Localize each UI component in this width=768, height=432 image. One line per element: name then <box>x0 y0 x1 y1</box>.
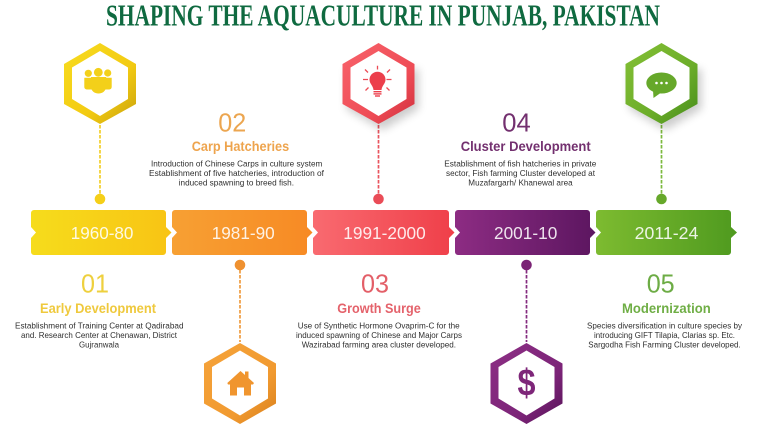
text block: 05 Modernization: introducing GIFT Tilapia, Clarias sp. Etc. <box>594 330 735 340</box>
text block: 04 Cluster Development: 04 <box>502 107 531 137</box>
icon: red hexagon with light bulb <box>342 43 418 130</box>
text block: 03 Growth Surge: 03 <box>361 268 389 298</box>
text block: 02 Carp Hatcheries: 02 <box>218 107 246 137</box>
panel: timeline 1991-2000 bar <box>313 210 454 255</box>
icon: purple hexagon with dollar sign: $ <box>518 362 536 404</box>
panel: timeline 1981-90 bar: 1981-90 <box>212 223 275 243</box>
connector: 1960-80 dashed line and dot <box>95 125 105 204</box>
panel: timeline 1960-80 bar: 1960-80 <box>71 223 134 243</box>
connector: 1991-2000 dashed line and dot <box>373 125 384 204</box>
text block: 03 Growth Surge: Growth Surge <box>337 301 421 316</box>
text block: 01 Early Development: and. Research Center at Chenawan, District <box>21 330 178 340</box>
connector: 2001-10 dashed line and dot <box>521 260 532 342</box>
text block: 04 Cluster Development: sector, Fish farming Cluster developed at <box>446 168 596 178</box>
text block: 02 Carp Hatcheries: Establishment of five hatcheries, introduction of <box>149 168 325 178</box>
text block: 01 Early Development <box>15 268 184 350</box>
text block: 02 Carp Hatcheries: Carp Hatcheries <box>192 139 289 154</box>
text block: 04 Cluster Development: Establishment of fish hatcheries in private <box>444 158 597 168</box>
icon: purple hexagon with dollar sign <box>490 343 562 424</box>
text block: 01 Early Development: Establishment of Training Center at Qadirabad <box>15 320 184 330</box>
text block: 01 Early Development: Early Development <box>40 301 156 316</box>
panel: timeline 1991-2000 bar: 1991-2000 <box>343 223 426 243</box>
text block: 03 Growth Surge: induced spawning of Chinese and Major Carps <box>296 330 462 340</box>
panel: timeline 1981-90 bar <box>172 210 312 255</box>
icon: orange hexagon with house <box>204 343 276 424</box>
connector: 2011-24 dashed line and dot <box>656 125 667 204</box>
text block: 01 Early Development: 01 <box>81 268 109 298</box>
text block: 02 Carp Hatcheries <box>149 107 325 188</box>
text block: 05 Modernization <box>587 268 743 350</box>
text block: 04 Cluster Development: Muzafargarh/ Khanewal area <box>468 178 573 188</box>
text block: 02 Carp Hatcheries: induced spawning to breed fish. <box>179 178 294 188</box>
text block: 03 Growth Surge <box>296 268 462 350</box>
text block: 04 Cluster Development <box>444 107 597 188</box>
text block: 05 Modernization: 05 <box>647 268 675 298</box>
text block: 02 Carp Hatcheries: Introduction of Chinese Carps in culture system <box>151 158 322 168</box>
panel: timeline 2001-10 bar: 2001-10 <box>494 223 558 243</box>
text block: 03 Growth Surge: Use of Synthetic Hormone Ovaprim-C for the <box>298 320 460 330</box>
connector: 1981-90 dashed line and dot <box>235 260 245 342</box>
panel: timeline 2001-10 bar <box>455 210 596 255</box>
text block: 05 Modernization: Sargodha Fish Farming Cluster developed. <box>588 340 741 350</box>
text block: 01 Early Development: Gujranwala <box>79 340 119 350</box>
text block: 03 Growth Surge: Wazirabad farming area cluster developed. <box>302 340 456 350</box>
text block: 05 Modernization: Species diversification in culture species by <box>587 320 743 330</box>
icon: green hexagon with speech bubble <box>626 43 702 130</box>
text block: 05 Modernization: Modernization <box>622 301 711 316</box>
icon: yellow hexagon with people <box>64 43 136 124</box>
panel: timeline 2011-24 bar: 2011-24 <box>635 223 699 243</box>
panel: timeline 1960-80 bar <box>31 210 172 255</box>
text block: 04 Cluster Development: Cluster Development <box>461 139 591 154</box>
panel: timeline 2011-24 bar <box>596 210 737 255</box>
